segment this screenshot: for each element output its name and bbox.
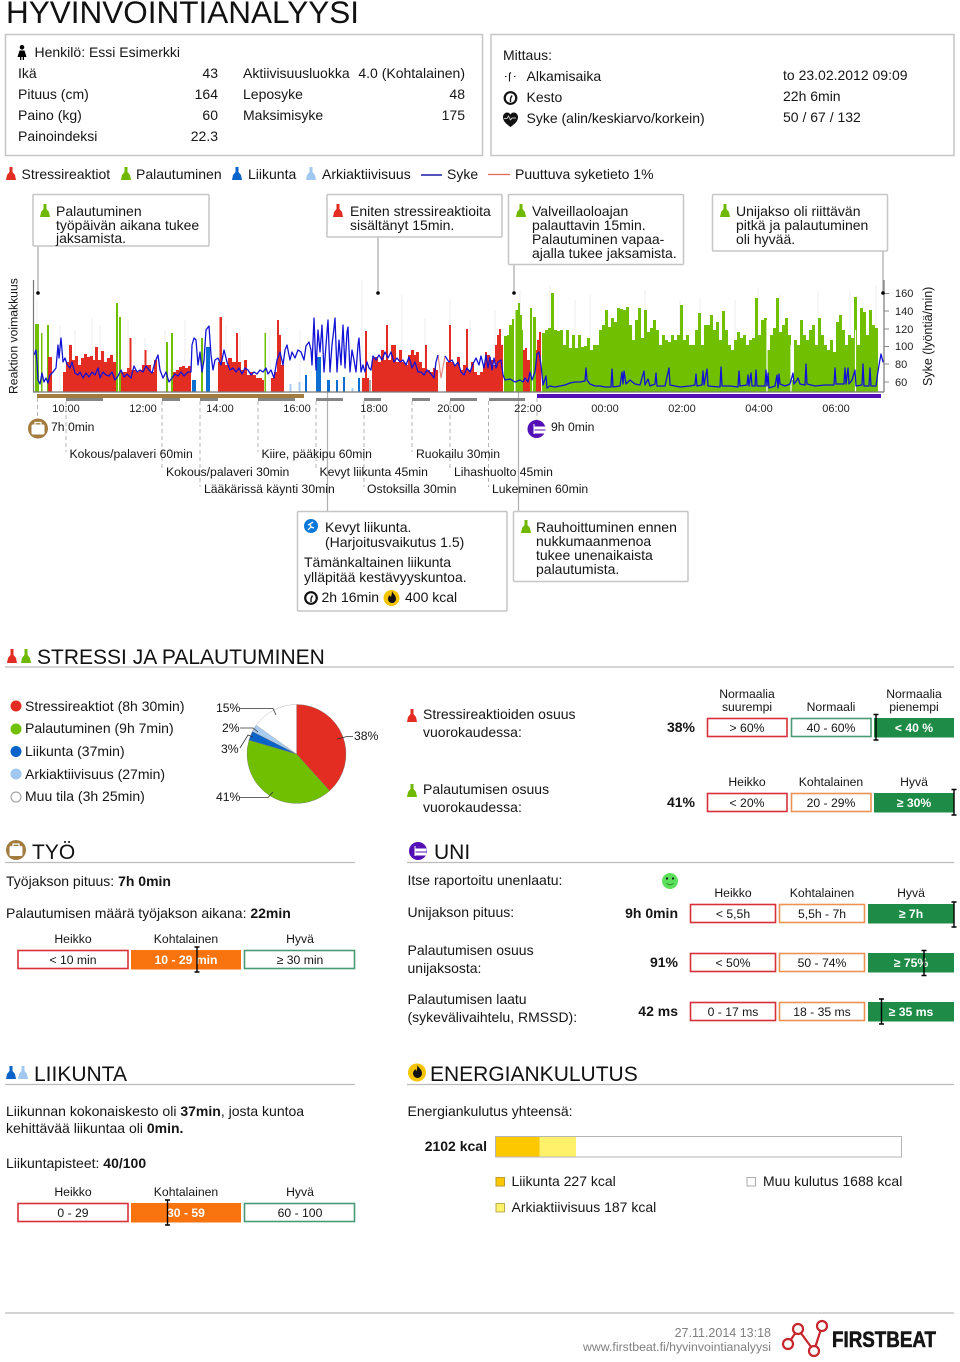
person values: 164 — [195, 86, 218, 102]
callout: recovery during workday — [33, 194, 209, 246]
stress share row: > 60% — [730, 721, 765, 735]
callout: light exercise: ylläpitää kestävyyskuntoa. — [304, 569, 467, 585]
recovery share row: < 20% — [730, 796, 765, 810]
logo: Firstbeat — [783, 1321, 936, 1356]
scale marker — [165, 1200, 170, 1225]
icon: running — [304, 519, 318, 533]
sleep duration: 9h 0min — [551, 420, 594, 434]
person values: 4.0 (Kohtalainen) — [358, 65, 465, 81]
sleep length row: < 5,5h — [716, 907, 750, 921]
scale marker — [874, 714, 878, 740]
callout: calming before bed: palautumista. — [536, 561, 619, 577]
sleep length row: Unijakson pituus: — [408, 904, 514, 920]
section: exercise: Liikunnan kokonaiskesto oli 37min, josta kuntoa — [6, 1103, 304, 1119]
stress share row: 40 - 60% — [807, 721, 856, 735]
time axis labels: 14:00 — [206, 403, 234, 415]
callout: sleep was long enough: Unijakso oli riittävän — [736, 203, 860, 219]
section: work: Kohtalainen — [154, 932, 218, 946]
sleep recovery share row: ≥ 75% — [894, 956, 928, 970]
icon: flame — [384, 590, 400, 606]
panel: measurement details: Kesto — [526, 89, 563, 105]
scale marker — [952, 790, 956, 815]
callout: most recovering waking time: palauttavin 15min. — [532, 217, 646, 233]
activity dashed leaders — [38, 398, 537, 487]
activity labels: Kokous/palaveri 60min — [70, 447, 193, 461]
energy legend: Arkiaktiivisuus 187 kcal — [512, 1199, 656, 1215]
chart leader lines — [38, 237, 883, 511]
pie chart legend — [10, 698, 185, 804]
activity labels: Ruokailu 30min — [416, 447, 500, 461]
callout: recovery during workday: työpäivän aikana tukee — [56, 217, 199, 233]
pie chart legend: Palautuminen (9h 7min) — [25, 720, 174, 736]
callout: light exercise: (Harjoitusvaikutus 1.5) — [325, 534, 464, 550]
icon: flame — [408, 1064, 426, 1082]
callout: most stress reactions: Eniten stressireaktioita — [350, 203, 491, 219]
stress share row: Normaalia — [719, 687, 775, 701]
recovery share row: Palautumisen osuus — [423, 781, 549, 797]
person values: 60 — [202, 107, 218, 123]
recovery share row: Kohtalainen — [799, 775, 863, 789]
pie chart: 38% — [354, 729, 379, 743]
pie chart: 41% — [216, 790, 241, 804]
heart rate axis values: 80 — [895, 359, 907, 371]
sleep recovery share row: unijaksosta: — [408, 960, 481, 976]
activity labels: Kiire, pääkipu 60min — [262, 447, 372, 461]
scale marker — [194, 947, 200, 972]
icon: work period — [28, 418, 48, 438]
activity labels: Ostoksilla 30min — [367, 482, 456, 496]
sleep period bar — [537, 394, 881, 398]
sleep length row: 9h 0min — [625, 905, 678, 921]
section: exercise: Kohtalainen — [154, 1185, 218, 1199]
recovery share row: Hyvä — [900, 775, 928, 789]
heart rate line — [34, 318, 884, 388]
callout: most stress reactions: sisältänyt 15min. — [350, 217, 454, 233]
callout: recovery during workday: jaksamista. — [55, 230, 126, 246]
stress share row: Normaali — [807, 700, 855, 714]
pie chart legend: Liikunta (37min) — [25, 743, 125, 759]
sleep length row: ≥ 7h — [899, 907, 923, 921]
person values: 48 — [449, 86, 465, 102]
legend: Stressireaktiot — [22, 166, 110, 182]
section heading: stress and recovery — [5, 646, 954, 669]
section: exercise: 0 - 29 — [57, 1206, 89, 1220]
stress share row: < 40 % — [895, 721, 933, 735]
stress share row: vuorokaudessa: — [423, 724, 522, 740]
stress share row — [407, 687, 954, 740]
sleep recovery share row — [408, 942, 954, 976]
section: exercise: kehittävää liikuntaa oli 0min. — [6, 1120, 183, 1136]
panel: measurement details: Alkamisaika — [526, 68, 601, 84]
panel: measurement details: to 23.02.2012 09:09 — [783, 67, 908, 83]
person name: Henkilö: Essi Esimerkki — [34, 44, 180, 60]
time axis labels: 20:00 — [437, 403, 465, 415]
person values — [18, 65, 465, 144]
panel: person details — [6, 34, 482, 156]
pie chart: 2% — [222, 721, 240, 735]
legend: Puuttuva syketieto 1% — [515, 166, 654, 182]
person values: Painoindeksi — [18, 128, 97, 144]
chart: reaction strength and heart rate — [34, 280, 889, 392]
energy bar — [496, 1136, 902, 1157]
section: sleep: UNI — [434, 841, 470, 864]
time axis labels: 02:00 — [668, 403, 696, 415]
work duration: 7h 0min — [51, 420, 94, 434]
person values: Paino (kg) — [18, 107, 82, 123]
heart rate axis values: 100 — [895, 341, 913, 353]
sleep recovery share row: 50 - 74% — [798, 956, 847, 970]
person values: Pituus (cm) — [18, 86, 89, 102]
recovery quality row: ≥ 35 ms — [889, 1005, 934, 1019]
callout: light exercise: 2h 16min — [322, 589, 379, 605]
stress share row: suurempi — [722, 700, 772, 714]
sleep recovery share row: 91% — [650, 954, 679, 970]
callout: sleep was long enough: oli hyvää. — [736, 231, 795, 247]
time axis labels: 10:00 — [52, 403, 80, 415]
callout: sleep was long enough: pitkä ja palautuminen — [736, 217, 868, 233]
panel: measurement details: Mittaus: — [503, 47, 552, 63]
section: energy expenditure: ENERGIANKULUTUS — [430, 1063, 638, 1086]
recovery quality row: 18 - 35 ms — [793, 1005, 851, 1019]
stress share row: 38% — [667, 719, 696, 735]
recovery quality row: 0 - 17 ms — [708, 1005, 758, 1019]
section: work — [5, 840, 355, 972]
section: exercise: 30 - 59 — [167, 1206, 205, 1220]
section: energy expenditure — [407, 1063, 954, 1215]
activity labels — [70, 447, 588, 496]
section: exercise: Heikko — [54, 1185, 92, 1199]
time axis labels: 22:00 — [514, 403, 542, 415]
legend: Liikunta — [248, 166, 296, 182]
recovery share row: 20 - 29% — [807, 796, 856, 810]
pie chart — [216, 701, 379, 804]
sleep recovery share row: < 50% — [716, 956, 751, 970]
section: work: Heikko — [54, 932, 92, 946]
heart rate axis values: 160 — [895, 288, 913, 300]
white gaps in recovery bars — [515, 300, 856, 392]
activity labels: Lääkärissä käynti 30min — [204, 482, 335, 496]
callout: recovery during workday: Palautuminen — [56, 203, 142, 219]
footer: 27.11.2014 13:18 — [675, 1326, 771, 1340]
callout: calming before bed — [514, 512, 688, 582]
sleep recovery share row: Palautumisen osuus — [408, 942, 534, 958]
callout: light exercise: Tämänkaltainen liikunta — [304, 554, 451, 570]
section: work: 10 - 29 min — [154, 953, 218, 967]
section: work: ≥ 30 min — [277, 953, 323, 967]
recovery share row: 41% — [667, 794, 696, 810]
heart rate axis values: 120 — [895, 324, 913, 336]
pie chart legend: Muu tila (3h 25min) — [25, 788, 145, 804]
energy legend: Liikunta 227 kcal — [512, 1173, 616, 1189]
callout: most recovering waking time: Palautuminen vapaa- — [532, 231, 665, 247]
callout anchor dots — [36, 291, 885, 295]
time axis labels: 00:00 — [591, 403, 619, 415]
section: sleep: Kohtalainen — [790, 886, 854, 900]
logo: Firstbeat: FIRSTBEAT — [832, 1327, 936, 1352]
section: work: Työjakson pituus: 7h 0min — [6, 873, 171, 889]
recovery quality row — [408, 991, 954, 1025]
section: sleep — [407, 841, 956, 1025]
time axis labels: 12:00 — [129, 403, 157, 415]
person values: Aktiivisuusluokka — [243, 65, 350, 81]
pie chart legend: Stressireaktiot (8h 30min) — [25, 698, 185, 714]
activity labels: Lihashuolto 45min — [454, 465, 553, 479]
recovery share row: ≥ 30% — [897, 796, 931, 810]
chart axes — [34, 280, 884, 392]
section: work: < 10 min — [49, 953, 97, 967]
person values: Maksimisyke — [243, 107, 323, 123]
panel: measurement details: 22h 6min — [783, 88, 841, 104]
section heading: stress and recovery: STRESSI JA PALAUTUMINEN — [37, 646, 325, 669]
section: work: TYÖ — [32, 841, 75, 864]
section: work: Palautumisen määrä työjakson aikana: 22min — [6, 905, 291, 921]
heart rate axis values: 140 — [895, 306, 913, 318]
stress share row: Stressireaktioiden osuus — [423, 706, 576, 722]
callout: most stress reactions — [327, 194, 502, 237]
panel: measurement details: Syke (alin/keskiarvo/korkein) — [526, 110, 705, 126]
energy legend — [496, 1173, 902, 1215]
heart rate ticks — [884, 294, 889, 382]
panel: measurement details — [491, 34, 954, 156]
stress share row: pienempi — [889, 700, 939, 714]
recovery quality row: (sykevälivaihtelu, RMSSD): — [408, 1009, 577, 1025]
green recovery bars — [35, 293, 878, 392]
legend: Palautuminen — [136, 166, 222, 182]
heart rate axis values — [895, 288, 913, 389]
sleep length row — [408, 902, 956, 927]
axis label: reaction strength: Reaktion voimakkuus — [6, 278, 20, 394]
footer: www.firstbeat.fi/hyvinvointianalyysi — [582, 1340, 771, 1354]
section: exercise: 60 - 100 — [278, 1206, 323, 1220]
pie chart: 3% — [221, 742, 239, 756]
person values: 175 — [442, 107, 465, 123]
icon: person — [18, 45, 26, 60]
time axis labels — [52, 403, 850, 415]
section: exercise: LIIKUNTA — [34, 1063, 127, 1086]
callout: most recovering waking time: ajalla tukee jaksamista. — [532, 245, 677, 261]
icon: clock — [305, 592, 317, 604]
pie chart: 15% — [216, 701, 241, 715]
panel: measurement details: 50 / 67 / 132 — [783, 109, 861, 125]
heart rate axis values: 60 — [895, 377, 907, 389]
section: exercise: Liikuntapisteet: 40/100 — [6, 1155, 146, 1171]
icon: duration clock — [505, 92, 516, 104]
icon: briefcase — [6, 840, 26, 860]
axis label: heart rate: Syke (lyöntiä/min) — [921, 287, 935, 386]
callout: sleep was long enough — [712, 194, 888, 251]
activity labels: Kokous/palaveri 30min — [166, 465, 289, 479]
pie chart legend: Arkiaktiivisuus (27min) — [25, 766, 165, 782]
person values: 22.3 — [191, 128, 218, 144]
person values: Ikä — [18, 65, 37, 81]
energy legend: Muu kulutus 1688 kcal — [763, 1173, 902, 1189]
section: sleep: Hyvä — [897, 886, 925, 900]
person values: 43 — [202, 65, 218, 81]
recovery share row: vuorokaudessa: — [423, 799, 522, 815]
icon: heart — [503, 112, 518, 127]
time axis labels: 06:00 — [822, 403, 850, 415]
activity period bars — [66, 398, 525, 401]
time axis labels: 04:00 — [745, 403, 773, 415]
person values: Leposyke — [243, 86, 303, 102]
callout: light exercise: 400 kcal — [405, 589, 457, 605]
section: energy expenditure: Energiankulutus yhteensä: — [408, 1103, 572, 1119]
activity labels: Kevyt liikunta 45min — [320, 465, 428, 479]
recovery share row: Heikko — [728, 775, 766, 789]
icon: start time — [505, 72, 516, 82]
recovery quality row: Palautumisen laatu — [408, 991, 527, 1007]
time axis labels: 16:00 — [283, 403, 311, 415]
red stress bars — [48, 317, 541, 392]
icon: sleep period — [528, 420, 546, 438]
section: exercise: Hyvä — [286, 1185, 314, 1199]
footer — [5, 1313, 954, 1356]
missing heart rate segment — [438, 355, 445, 378]
legend — [6, 166, 654, 182]
section: sleep: Heikko — [714, 886, 752, 900]
sleep length row: 5,5h - 7h — [798, 907, 846, 921]
time axis labels: 18:00 — [360, 403, 388, 415]
callout: most recovering waking time: Valveillaoloajan — [532, 203, 628, 219]
faint spikes — [37, 280, 876, 392]
callout: most recovering waking time — [508, 194, 684, 264]
callout: calming before bed: tukee unenaikaista — [536, 547, 653, 563]
section: energy expenditure: 2102 kcal — [425, 1138, 487, 1154]
section: sleep: Itse raportoitu unenlaatu: — [408, 872, 562, 888]
callout: light exercise: Kevyt liikunta. — [325, 519, 411, 535]
callout: calming before bed: Rauhoittuminen ennen — [536, 519, 677, 535]
section: work: Hyvä — [286, 932, 314, 946]
work period bar — [37, 394, 304, 398]
activity labels: Lukeminen 60min — [492, 482, 588, 496]
legend: Arkiaktiivisuus — [322, 166, 411, 182]
callout: calming before bed: nukkumaanmenoa — [536, 533, 651, 549]
recovery share row — [407, 775, 956, 815]
icon: bed — [409, 842, 427, 860]
recovery quality row: 42 ms — [638, 1003, 678, 1019]
stress share row: Normaalia — [886, 687, 942, 701]
callout: light exercise — [298, 512, 507, 611]
blue exercise and light activity bars — [192, 347, 360, 392]
section: exercise — [5, 1063, 355, 1225]
icon: smiley — [662, 873, 678, 889]
legend: Syke — [447, 166, 478, 182]
